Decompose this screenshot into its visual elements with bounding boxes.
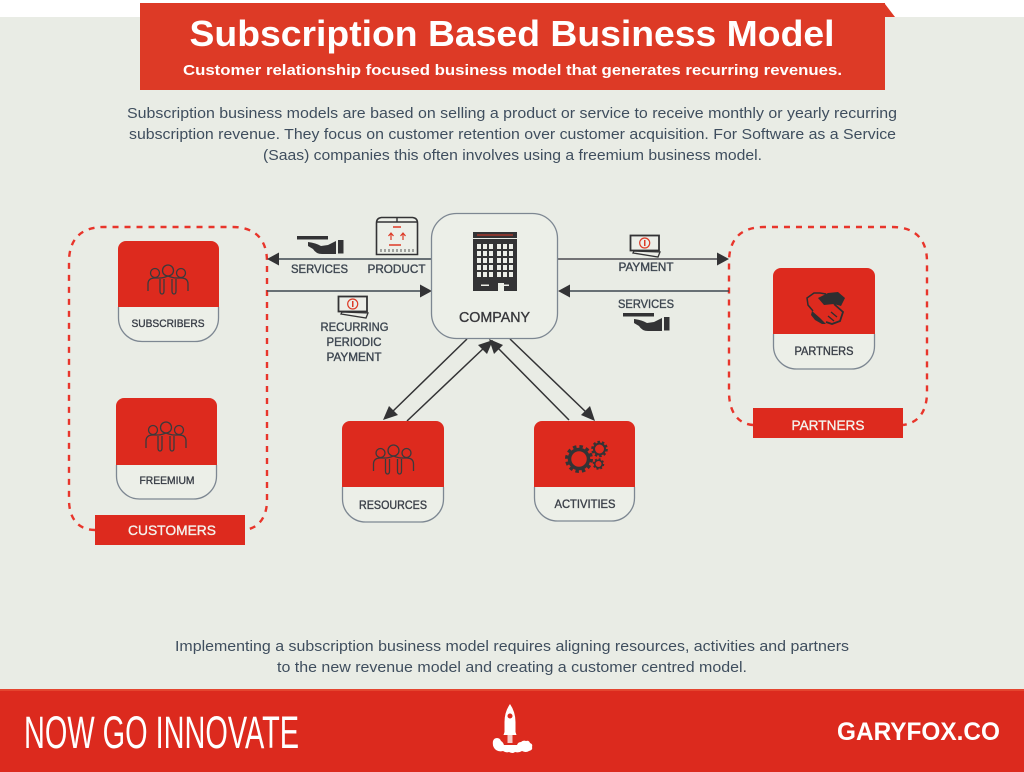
panel: company	[432, 214, 558, 338]
arrow: activities to company	[489, 339, 569, 420]
card: subscribers	[118, 241, 219, 342]
arrow: company to resources	[383, 339, 467, 420]
label: recurring periodic payment	[320, 320, 388, 364]
footer website: GARYFOX.CO	[837, 718, 1000, 746]
arrow: company to activities	[510, 339, 595, 421]
icon: product box	[376, 218, 418, 254]
icon: service hand left	[297, 236, 344, 254]
card: freemium	[116, 398, 217, 499]
closing paragraph	[175, 638, 849, 676]
arrow: payment from customers	[267, 284, 432, 298]
intro paragraph: (Saas) companies this often involves using a freemium business model.	[263, 147, 762, 164]
header banner	[140, 3, 895, 90]
closing paragraph: to the new revenue model and creating a customer centred model.	[277, 659, 747, 676]
icon: gears	[566, 442, 607, 472]
label: recurring periodic payment: RECURRING	[320, 320, 388, 334]
label: recurring periodic payment: PAYMENT	[326, 350, 382, 364]
label box: customers	[95, 515, 245, 545]
icon: cash left	[338, 296, 368, 318]
label: services right: SERVICES	[618, 297, 674, 311]
label: payment: PAYMENT	[618, 260, 674, 274]
label: activities: ACTIVITIES	[554, 499, 616, 511]
footer slogan: NOW GO INNOVATE	[24, 707, 299, 758]
icon: people	[374, 445, 414, 474]
arrow: resources to company	[407, 340, 493, 421]
label: product: PRODUCT	[368, 262, 426, 276]
closing paragraph: Implementing a subscription business model requires aligning resources, activities and partners	[175, 638, 849, 655]
card: partners	[773, 268, 875, 369]
icon: people	[146, 422, 186, 451]
card: activities	[534, 421, 635, 521]
label box: partners	[753, 408, 903, 438]
icon: handshake	[807, 292, 845, 324]
label: subscribers: SUBSCRIBERS	[132, 318, 204, 330]
icon: people	[148, 265, 188, 294]
panel: customers group outline	[69, 227, 267, 530]
card: resources	[342, 421, 444, 522]
icon: service hand right	[623, 313, 670, 331]
label: partners: PARTNERS	[794, 346, 854, 358]
arrow: services to customers	[267, 252, 431, 266]
arrow: payment to partners	[558, 252, 729, 266]
title: Subscription Based Business Model	[190, 13, 834, 54]
icon: cash right	[630, 236, 660, 257]
intro paragraph: Subscription business models are based on selling a product or service to receive monthly or yearly recurring	[127, 105, 897, 122]
arrow: services from partners	[558, 284, 729, 298]
label box: partners: PARTNERS	[792, 417, 864, 433]
icon: rocket	[493, 704, 532, 753]
label: company: COMPANY	[459, 310, 530, 326]
intro paragraph: subscription revenue. They focus on customer retention over customer acquisition. For Software as a Service	[129, 126, 896, 143]
label box: customers: CUSTOMERS	[128, 522, 216, 538]
label: resources: RESOURCES	[359, 500, 427, 512]
label: recurring periodic payment: PERIODIC	[326, 335, 382, 349]
label: services left: SERVICES	[291, 262, 348, 276]
subtitle: Customer relationship focused business model that generates recurring revenues.	[183, 62, 842, 79]
intro paragraph	[127, 105, 897, 164]
label: freemium: FREEMIUM	[140, 475, 194, 487]
icon: office building	[473, 232, 517, 291]
footer band	[0, 689, 1024, 772]
panel: partners group outline	[729, 227, 927, 425]
